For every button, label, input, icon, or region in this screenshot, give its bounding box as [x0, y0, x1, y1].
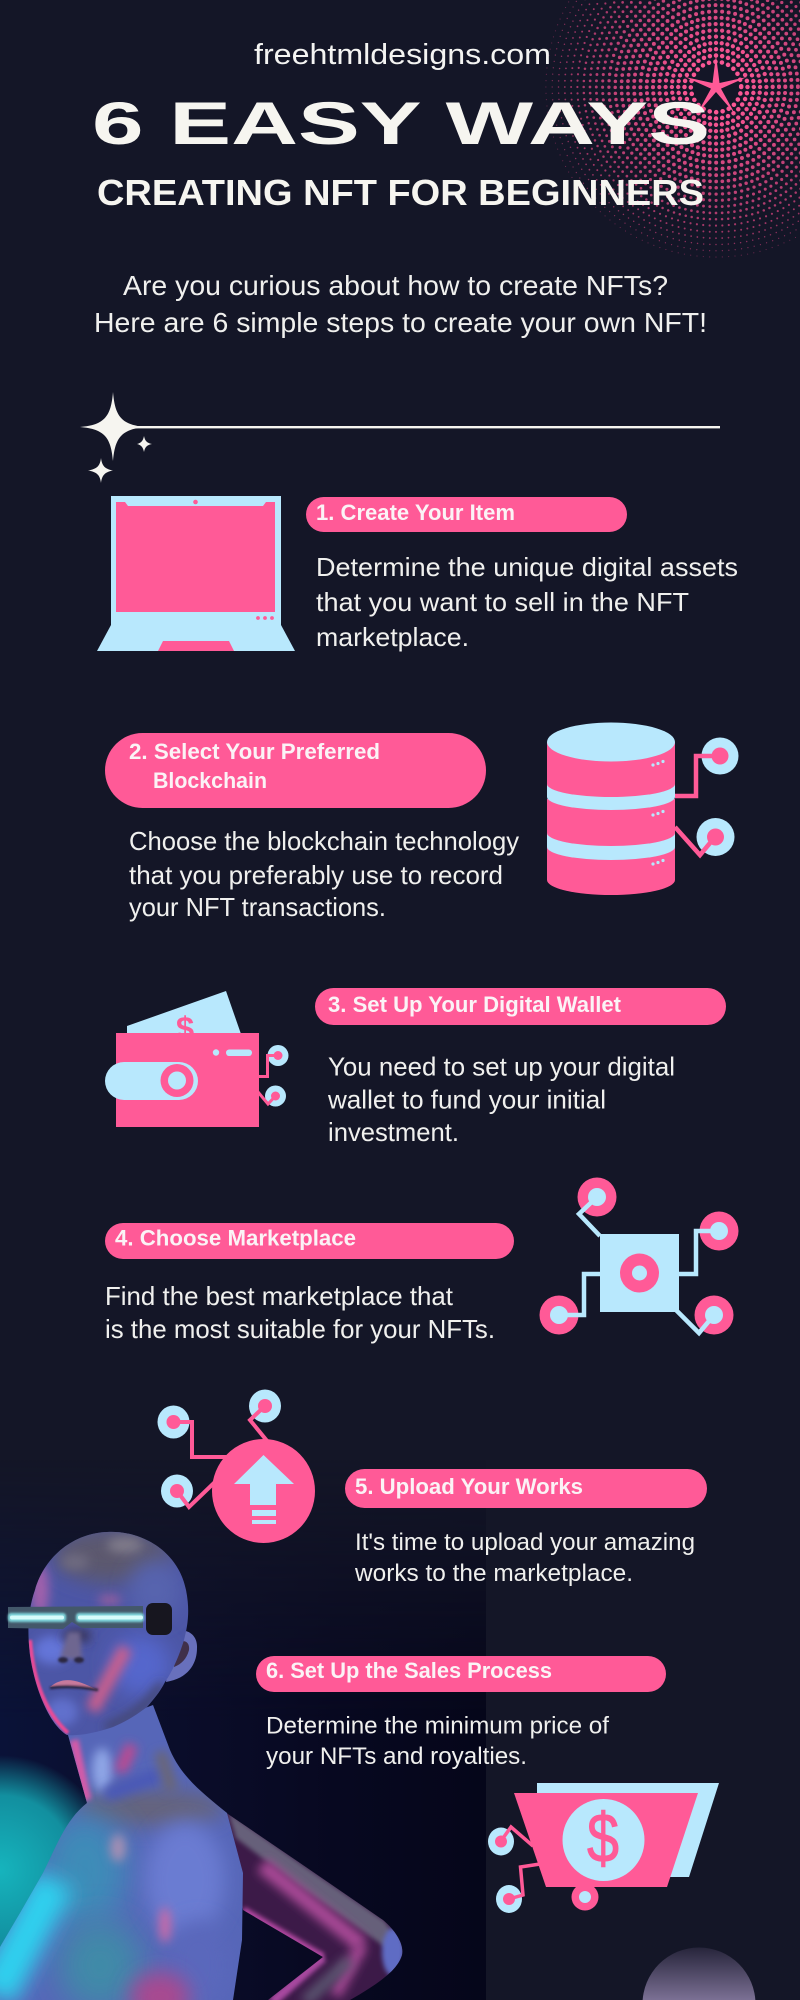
step 1: description: [316, 552, 738, 652]
intro text: Here are 6 simple steps to create your own NFT!: [94, 307, 707, 338]
step 3: icon wallet: [105, 991, 288, 1127]
step 2: heading pill: Blockchain: [153, 768, 267, 793]
step 4: description: [105, 1281, 495, 1344]
step 5: description: It's time to upload your amazing: [355, 1529, 695, 1556]
intro text: Are you curious about how to create NFTs?: [123, 270, 668, 301]
step 5: icon upload: [158, 1390, 315, 1543]
step 1: heading pill: 1. Create Your Item: [316, 500, 515, 525]
visor: [8, 1603, 172, 1635]
step 6: heading pill: [256, 1656, 666, 1692]
back arm: [227, 1814, 402, 2000]
step 2: heading pill: 2. Select Your Preferred: [129, 739, 380, 764]
step 6: heading pill: 6. Set Up the Sales Process: [266, 1658, 552, 1683]
step 3: heading pill: [315, 988, 726, 1025]
step 6: icon money tray: [488, 1783, 719, 1913]
sparkle divider: [80, 392, 720, 483]
step 2: description: [129, 826, 519, 922]
step 1: heading pill: [306, 497, 627, 532]
step 6: description: [266, 1712, 609, 1770]
step 2: icon database: [547, 722, 738, 895]
step 3: description: You need to set up your digital: [328, 1052, 675, 1082]
decorative moon circle: [642, 1948, 756, 2000]
neck and torso: [0, 1700, 260, 2000]
step 4: description: Find the best marketplace that: [105, 1281, 454, 1311]
step 4: heading pill: 4. Choose Marketplace: [115, 1226, 356, 1250]
step 4: heading pill: [105, 1223, 514, 1259]
step 2: description: your NFT transactions.: [129, 892, 386, 922]
step 4: icon chip network: [540, 1178, 738, 1334]
step 5: heading pill: 5. Upload Your Works: [355, 1474, 583, 1499]
step 1: description: that you want to sell in the NFT: [316, 587, 689, 617]
step 6: icon money tray: $: [587, 1799, 619, 1877]
step 6: description: your NFTs and royalties.: [266, 1743, 527, 1770]
image panel backdrop: [0, 1591, 486, 2000]
step 2: heading pill: [105, 733, 486, 808]
subtitle: CREATING NFT FOR BEGINNERS: [97, 172, 704, 213]
step 3: description: wallet to fund your initial: [327, 1084, 606, 1114]
halftone burst: [546, 0, 800, 257]
title: 6 EASY WAYS: [92, 90, 710, 157]
step 3: heading pill: 3. Set Up Your Digital Wallet: [328, 992, 622, 1017]
step 2: description: that you preferably use to record: [129, 860, 503, 890]
step 5: description: [354, 1529, 695, 1587]
step 4: description: is the most suitable for your NFTs.: [105, 1314, 495, 1344]
step 1: icon laptop: [97, 496, 295, 651]
step 3: description: [327, 1052, 675, 1147]
intro text: [94, 270, 707, 338]
metallic figure with visor: [0, 1525, 420, 2000]
teal glow: [0, 1755, 115, 1985]
step 3: icon wallet: $: [176, 1010, 194, 1047]
step 1: description: marketplace.: [316, 622, 469, 652]
step 5: heading pill: [345, 1469, 707, 1508]
ear: [166, 1630, 197, 1682]
site name: freehtmldesigns.com: [254, 39, 551, 71]
step 6: description: Determine the minimum price of: [266, 1712, 609, 1740]
step 3: description: investment.: [328, 1117, 459, 1147]
step 2: description: Choose the blockchain technology: [129, 826, 519, 856]
step 5: description: works to the marketplace.: [354, 1560, 633, 1587]
head: [28, 1532, 188, 1736]
step 1: description: Determine the unique digital assets: [316, 552, 738, 582]
